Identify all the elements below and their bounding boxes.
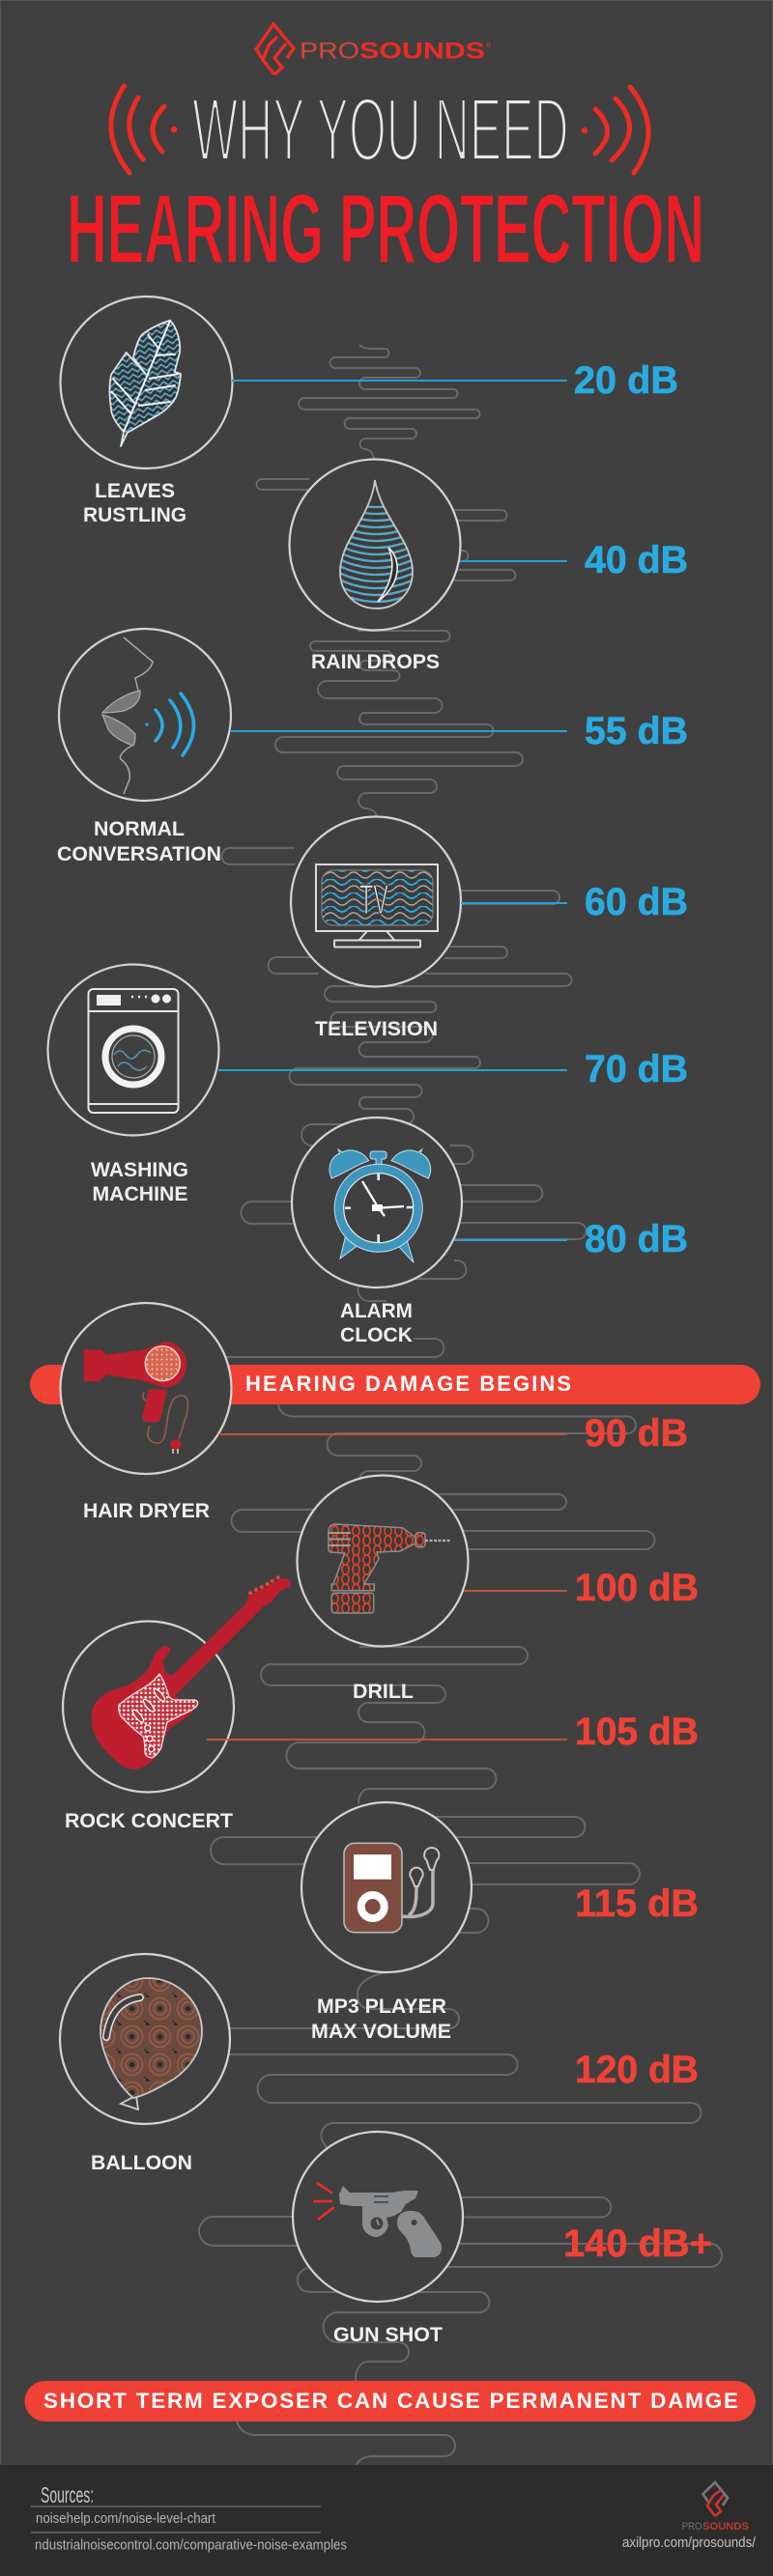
source link 2: ndustrialnoisecontrol.com/comparative-noise-examples: [35, 2538, 347, 2554]
item: drill 100 dB: [298, 1476, 699, 1703]
item: rain drops 40 dB: [290, 460, 688, 673]
label: RAIN DROPS: [311, 651, 440, 673]
value: 70 dB: [585, 1048, 688, 1090]
item: hair dryer 90 dB: [60, 1303, 688, 1522]
label: BALLOON: [91, 2152, 192, 2174]
label: TELEVISION: [315, 1018, 438, 1040]
value: 40 dB: [585, 539, 688, 581]
item: television 60 dB: [291, 817, 688, 1040]
icon: balloon: [100, 1978, 202, 2109]
website: axilpro.com/prosounds/: [622, 2535, 757, 2551]
icon: tv: [316, 864, 438, 947]
icon: right sound waves: [582, 87, 648, 173]
value: 105 dB: [575, 1711, 699, 1753]
item: balloon 120 dB: [60, 1954, 699, 2174]
sources heading: Sources:: [41, 2484, 94, 2508]
icon: revolver: [313, 2183, 442, 2257]
item: washing machine 70 dB: MACHINE: [93, 1183, 187, 1205]
label: MP3 PLAYER: [317, 1996, 446, 2018]
banner: short term exposure: SHORT TERM EXPOSER CAN CAUSE PERMANENT DAMGE: [43, 2389, 738, 2413]
icon: rain drop: [339, 479, 414, 609]
label: ALARM: [340, 1300, 413, 1322]
value: 80 dB: [585, 1218, 688, 1260]
item: washing machine 70 dB: [48, 964, 688, 1205]
item: leaves rustling 20 dB: [60, 297, 678, 526]
label: HAIR DRYER: [83, 1500, 210, 1522]
icon: alarm clock: [329, 1149, 431, 1262]
icon: speaking mouth: [102, 637, 194, 794]
icon: leaf: [110, 321, 181, 446]
label: WASHING: [91, 1159, 188, 1181]
label: DRILL: [353, 1681, 414, 1703]
value: 115 dB: [575, 1882, 699, 1925]
item: normal conversation 55 dB: CONVERSATION: [57, 843, 221, 865]
icon: drill: [329, 1524, 450, 1613]
item: rock concert 105 dB: [63, 1575, 699, 1832]
banner: short term exposure: [25, 2381, 756, 2421]
icon: tv: TV: [359, 876, 388, 923]
logo: ProSounds: SOUNDS: [359, 39, 485, 65]
value: 60 dB: [585, 881, 688, 923]
label: LEAVES: [95, 480, 175, 502]
title: why you need: WHY YOU NEED: [192, 80, 569, 180]
item: alarm clock 80 dB: [292, 1118, 688, 1346]
item: alarm clock 80 dB: CLOCK: [340, 1324, 413, 1346]
banner: hearing damage begins: HEARING DAMAGE BEGINS: [245, 1372, 571, 1396]
item: normal conversation 55 dB: [57, 629, 688, 865]
value: 55 dB: [585, 710, 688, 752]
logo: ProSounds: PRO: [300, 39, 359, 65]
value: 140 dB+: [563, 2222, 712, 2265]
item: gun shot 140 dB+: [293, 2132, 712, 2346]
footer: [0, 2465, 773, 2576]
label: ROCK CONCERT: [65, 1810, 233, 1832]
label: NORMAL: [94, 818, 185, 840]
label: GUN SHOT: [333, 2324, 443, 2346]
footer logo: SOUNDS: [702, 2521, 749, 2533]
value: 20 dB: [574, 359, 678, 402]
banner: hearing damage begins: [30, 1365, 760, 1404]
icon: washing machine: [89, 989, 178, 1113]
icon: left sound waves: [111, 86, 177, 173]
logo: ProSounds: [256, 24, 492, 74]
title: hearing protection: HEARING PROTECTION: [67, 173, 704, 284]
footer logo: [682, 2482, 749, 2533]
value: 90 dB: [585, 1412, 688, 1455]
icon: mp3 player: [344, 1843, 439, 1933]
logo: ProSounds: ®: [486, 42, 492, 49]
icon: electric guitar: [92, 1575, 290, 1769]
icon: hair dryer: [84, 1342, 187, 1454]
source link 1: noisehelp.com/noise-level-chart: [36, 2511, 215, 2527]
item: mp3 player 115 dB: MAX VOLUME: [311, 2021, 451, 2043]
value: 100 dB: [575, 1567, 699, 1609]
item: mp3 player 115 dB: [301, 1802, 699, 2043]
item: leaves rustling 20 dB: RUSTLING: [83, 504, 186, 526]
value: 120 dB: [575, 2049, 699, 2091]
footer logo: PRO: [682, 2521, 702, 2533]
